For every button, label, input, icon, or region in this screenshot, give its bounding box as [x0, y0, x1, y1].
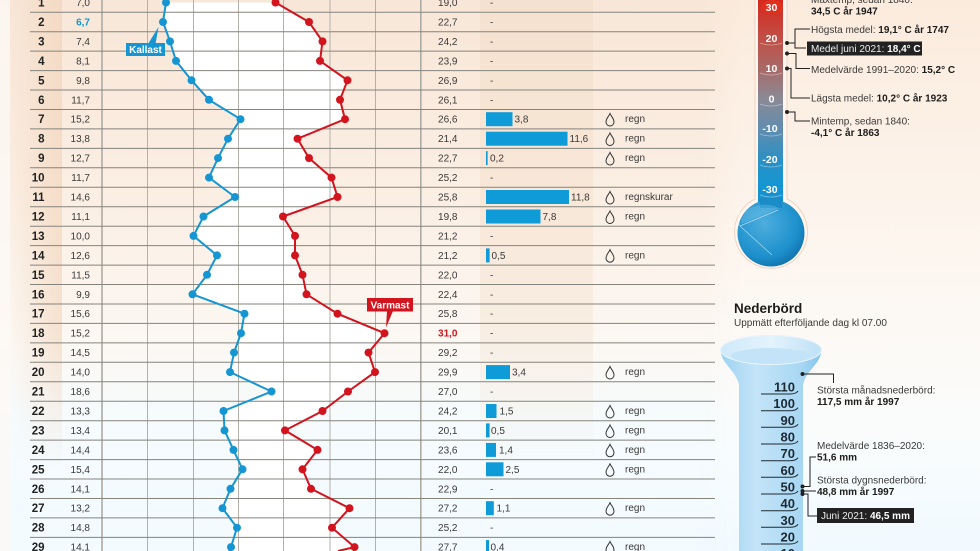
day numbers: 12: [32, 212, 44, 224]
minimum temperature column: 15,6: [71, 309, 90, 320]
thermometer labels: -4,1° C år 1863: [811, 127, 880, 139]
highlighted June 2021 rainfall: Juni 2021: 46,5 mm: [821, 511, 910, 522]
minimum temperature column: 11,1: [71, 212, 90, 223]
heading: precipitation: Nederbörd: [734, 301, 802, 316]
minimum temperature column: 14,6: [71, 192, 90, 204]
minimum temperature column: 14,0: [71, 368, 90, 379]
white band between min and max curves: [163, 2, 384, 551]
minimum temperature column: 8,1: [76, 56, 90, 67]
day numbers: 27: [32, 503, 44, 515]
heading: precipitation: Uppmätt efterföljande dag kl 07.00: [734, 318, 887, 329]
day numbers: 15: [32, 270, 45, 282]
rain gauge labels: Största månadsnederbörd:: [817, 384, 935, 396]
thermometer labels: Högsta medel: 19,1° C år 1747: [811, 24, 949, 36]
day numbers: 5: [38, 75, 45, 87]
maximum temperature column: 24,2: [438, 37, 458, 48]
minimum temperature column: 15,4: [71, 465, 90, 476]
day numbers: 24: [32, 445, 45, 457]
weather descriptions: regn: [625, 367, 645, 378]
day numbers: 14: [32, 250, 45, 262]
day numbers: 17: [32, 309, 44, 321]
thermometer: 10: [766, 63, 777, 75]
rain bars: [486, 112, 569, 551]
minimum temperature column: 15,2: [71, 329, 90, 340]
weather descriptions: regnskurar: [625, 192, 673, 203]
maximum temperature column: 25,2: [438, 523, 458, 534]
weather descriptions: regn: [625, 114, 645, 125]
day numbers: 10: [32, 173, 44, 185]
rain amounts: 0,2: [490, 154, 504, 165]
day numbers: 2: [38, 17, 44, 29]
table grid: [30, 0, 715, 551]
weather descriptions: regn: [625, 425, 645, 436]
callout: coldest: [126, 27, 165, 56]
day numbers: [32, 0, 45, 551]
day numbers: 8: [38, 134, 45, 146]
day numbers: 16: [32, 289, 44, 301]
rain amounts: -: [490, 231, 493, 242]
rain amounts: 2,5: [506, 465, 520, 476]
rain gauge: 90: [781, 413, 795, 428]
day numbers: 9: [38, 153, 44, 165]
rain amounts: -: [490, 37, 493, 48]
minimum temperature column: 11,7: [71, 95, 90, 106]
rain amounts: -: [490, 523, 493, 534]
minimum temperature column: 14,5: [71, 348, 90, 359]
minimum temperature column: 6,7: [76, 18, 90, 28]
maximum temperature column: 22,0: [438, 270, 458, 281]
maximum temperature column: 23,9: [438, 56, 458, 67]
day numbers: 7: [38, 114, 44, 126]
day numbers: 11: [32, 192, 45, 204]
rain amounts: -: [490, 290, 493, 301]
thermometer labels: Mintemp, sedan 1840:: [811, 116, 910, 128]
day numbers: 23: [32, 425, 44, 437]
thermometer callout lines: [786, 29, 810, 121]
rain gauge: 30: [781, 513, 795, 528]
rain amounts: 1,5: [500, 406, 514, 418]
rain amounts: [490, 0, 590, 551]
minimum temperature column: 14,4: [71, 445, 90, 456]
minimum temperature column: 14,8: [71, 523, 90, 534]
callout: warmest: Varmast: [371, 300, 410, 312]
maximum temperature column: 22,0: [438, 465, 458, 476]
maximum temperature column: 25,2: [438, 173, 458, 184]
maximum temperature column: 21,2: [438, 231, 458, 242]
rain amounts: 11,8: [571, 192, 590, 204]
rain gauge: 40: [781, 496, 795, 511]
maximum temperature column: 21,4: [438, 134, 458, 145]
weather descriptions: regn: [625, 503, 645, 514]
rain amounts: 7,8: [542, 212, 557, 223]
weather icons: rain drops: [606, 114, 614, 551]
minimum temperature column: 12,6: [71, 251, 90, 262]
weather descriptions: [625, 114, 673, 551]
weather descriptions: regn: [625, 406, 645, 417]
maximum temperature column: 22,7: [438, 154, 458, 165]
day numbers: 18: [32, 328, 45, 340]
rain gauge: 110: [774, 380, 795, 394]
maximum temperature column: 21,2: [438, 251, 458, 262]
day numbers: 6: [38, 95, 44, 107]
maximum temperature column: 20,1: [438, 426, 458, 437]
rain amounts: -: [490, 95, 493, 106]
minimum temperature column: 10,0: [71, 231, 90, 242]
maximum temperature column: 26,1: [438, 95, 458, 106]
rain gauge callout lines: [801, 372, 834, 516]
maximum temperature column: 22,7: [438, 18, 458, 28]
maximum temperature column: 31,0: [438, 329, 458, 340]
rain gauge: 100: [773, 396, 795, 411]
minimum temperature line: [159, 0, 276, 551]
rain amounts: -: [490, 484, 493, 495]
day numbers: 13: [32, 231, 44, 243]
day numbers: 22: [32, 406, 44, 418]
thermometer labels: Medelvärde 1991–2020: 15,2° C: [811, 65, 955, 76]
weather descriptions: regn: [625, 445, 645, 456]
weather descriptions: regn: [625, 134, 645, 145]
maximum temperature column: 25,8: [438, 309, 458, 320]
day numbers: 21: [32, 386, 45, 398]
rain amounts: 0,5: [491, 426, 505, 437]
minimum temperature column: 13,3: [71, 406, 90, 418]
minimum temperature column: 13,4: [71, 426, 90, 437]
rain amounts: 0,5: [492, 251, 506, 262]
rain amounts: -: [490, 329, 493, 340]
minimum temperature column: 13,2: [71, 504, 90, 515]
thermometer: -30: [762, 184, 778, 196]
thermometer: -20: [762, 154, 778, 166]
minimum temperature column: 13,8: [71, 134, 90, 145]
thermometer: 20: [766, 33, 777, 45]
maximum temperature column: 22,9: [438, 484, 458, 495]
minimum temperature column: 12,7: [71, 154, 90, 165]
rain amounts: -: [490, 270, 493, 281]
rain amounts: -: [490, 18, 493, 28]
heading: precipitation: [734, 301, 887, 329]
maximum temperature column: 22,4: [438, 290, 458, 301]
maximum temperature column: 23,6: [438, 445, 458, 456]
thermometer: 30: [766, 2, 777, 14]
rain gauge: 20: [781, 530, 795, 544]
rain amounts: -: [490, 309, 493, 320]
weather descriptions: regn: [625, 250, 645, 261]
rain gauge labels: 51,6 mm: [817, 452, 857, 464]
rain gauge labels: Största dygnsnederbörd:: [817, 476, 927, 486]
minimum temperature column: 11,5: [71, 270, 90, 281]
rain gauge: 60: [781, 463, 795, 478]
weather descriptions: regn: [625, 464, 645, 475]
thermometer: 0: [769, 94, 775, 106]
minimum temperature column: 18,6: [71, 387, 90, 398]
day numbers: 19: [32, 348, 44, 360]
minimum temperature column: 7,4: [76, 37, 90, 48]
thermometer: -10: [762, 123, 778, 135]
day numbers: 26: [32, 484, 44, 496]
rain amounts: -: [490, 173, 493, 184]
minimum temperature column: [71, 0, 90, 551]
rain gauge labels: Medelvärde 1836–2020:: [817, 441, 925, 452]
rain amounts: -: [490, 56, 493, 67]
day numbers: 20: [32, 367, 44, 379]
rain gauge: 80: [781, 430, 795, 444]
minimum temperature column: 9,9: [76, 290, 90, 301]
minimum temperature column: 14,1: [71, 484, 90, 495]
rain amounts: 3,4: [512, 368, 526, 379]
day numbers: 4: [38, 56, 45, 68]
maximum temperature column: 27,0: [438, 387, 458, 398]
maximum temperature column: 19,8: [438, 212, 458, 223]
rain amounts: -: [490, 387, 493, 398]
maximum temperature column: 27,2: [438, 504, 458, 515]
rain gauge: 70: [781, 446, 795, 461]
maximum temperature column: 25,8: [438, 192, 458, 204]
minimum temperature column: 11,7: [71, 173, 90, 184]
rain amounts: -: [490, 76, 493, 87]
rain amounts: 3,8: [514, 115, 529, 126]
maximum temperature column: 29,2: [438, 348, 458, 359]
callout: coldest: Kallast: [129, 45, 163, 56]
thermometer labels: [807, 0, 955, 139]
maximum temperature column: 26,9: [438, 76, 458, 87]
rain amounts: 1,1: [496, 504, 511, 515]
minimum temperature column: 15,2: [71, 115, 90, 126]
maximum temperature column: 26,6: [438, 115, 458, 126]
rain amounts: -: [490, 348, 493, 359]
rain amounts: 1,4: [499, 445, 513, 456]
weather descriptions: regn: [625, 212, 645, 222]
rain gauge: [720, 335, 822, 551]
highlighted June 2021 mean: Medel juni 2021: 18,4° C: [811, 44, 921, 55]
maximum temperature column: 29,9: [438, 368, 458, 379]
maximum temperature column: 24,2: [438, 406, 458, 418]
maximum temperature column: [438, 0, 458, 551]
callout: warmest: [367, 298, 413, 328]
rain gauge labels: [817, 384, 935, 523]
thermometer labels: 34,5 C år 1947: [811, 6, 878, 18]
rain gauge labels: 117,5 mm år 1997: [817, 396, 900, 408]
day numbers: 3: [38, 36, 44, 48]
rain gauge: 50: [781, 480, 795, 494]
thermometer: [722, 0, 808, 268]
minimum temperature column: 9,8: [76, 76, 90, 87]
rain amounts: 11,6: [570, 134, 589, 145]
maximum temperature line: [272, 0, 388, 551]
thermometer labels: Lägsta medel: 10,2° C år 1923: [811, 92, 948, 104]
weather descriptions: regn: [625, 153, 645, 164]
rain gauge labels: 48,8 mm år 1997: [817, 486, 895, 498]
day numbers: 28: [32, 523, 45, 535]
day numbers: 25: [32, 464, 45, 476]
